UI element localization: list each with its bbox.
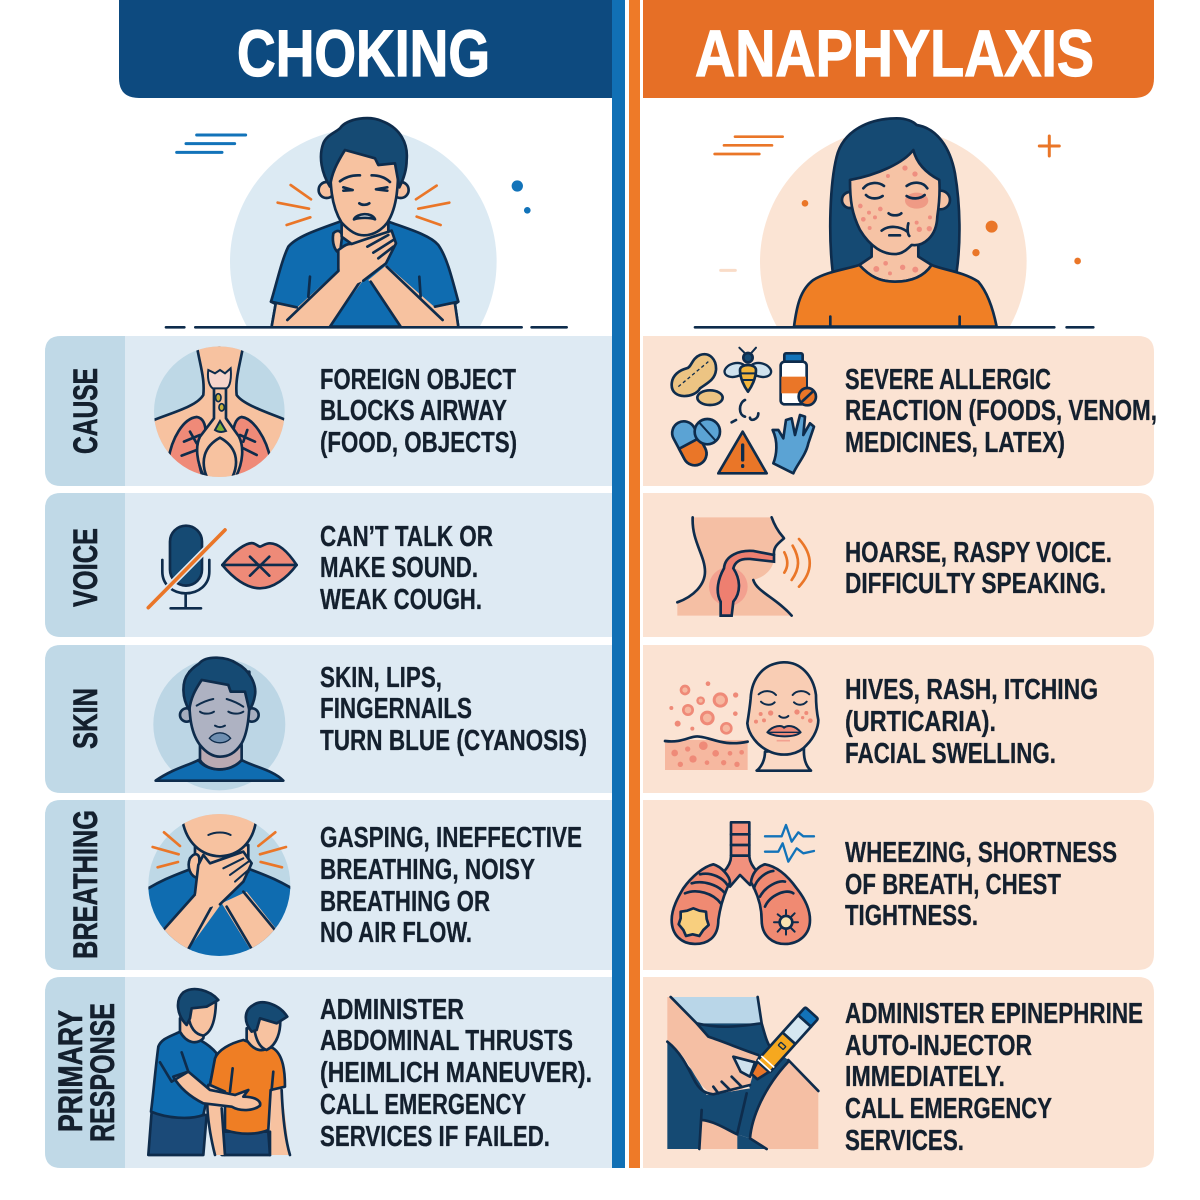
text: primary response choking: (HEIMLICH MANEUVER). xyxy=(320,1057,592,1089)
hero: choking person xyxy=(164,116,568,329)
icon: hands on throat xyxy=(148,814,290,956)
text: voice choking: MAKE SOUND. xyxy=(320,552,478,584)
text: skin choking: SKIN, LIPS, xyxy=(320,662,442,694)
icon: abdominal thrusts figures xyxy=(148,989,290,1155)
row: primary response (choking) xyxy=(45,977,612,1168)
text: voice anaphylaxis: DIFFICULTY SPEAKING. xyxy=(845,568,1106,600)
icon: inflamed airways xyxy=(672,822,814,944)
row: primary response (choking): PRIMARY xyxy=(52,1010,90,1132)
icon: airway blocked by object xyxy=(153,345,287,482)
header: anaphylaxis: ANAPHYLAXIS xyxy=(695,16,1094,90)
text: breathing anaphylaxis xyxy=(845,837,1117,932)
hero: anaphylaxis person xyxy=(694,117,1095,329)
text: skin choking: TURN BLUE (CYANOSIS) xyxy=(320,725,587,757)
row: cause (choking) xyxy=(45,336,612,486)
text: primary response choking: SERVICES IF FAILED. xyxy=(320,1121,550,1153)
icon: allergens xyxy=(668,348,816,473)
text: skin choking: FINGERNAILS xyxy=(320,693,472,725)
text: skin choking xyxy=(320,662,587,757)
row: cause (choking): CAUSE xyxy=(67,368,105,454)
text: skin anaphylaxis: HIVES, RASH, ITCHING xyxy=(845,674,1098,706)
text: primary response anaphylaxis: CALL EMERGENCY xyxy=(845,1093,1052,1125)
row: cause (anaphylaxis) xyxy=(643,336,1157,486)
text: breathing choking: GASPING, INEFFECTIVE xyxy=(320,822,582,854)
text: breathing choking: BREATHING OR xyxy=(320,886,490,918)
text: cause choking: (FOOD, OBJECTS) xyxy=(320,427,517,459)
icon: swollen throat and sound waves xyxy=(677,517,810,616)
text: cause anaphylaxis xyxy=(845,364,1157,459)
header: choking xyxy=(119,0,612,98)
text: breathing anaphylaxis: TIGHTNESS. xyxy=(845,900,978,932)
row: breathing (anaphylaxis) xyxy=(643,800,1154,970)
text: voice choking xyxy=(320,521,493,616)
text: primary response choking xyxy=(320,994,592,1153)
icon: hives and swollen face xyxy=(665,662,818,771)
text: voice anaphylaxis: HOARSE, RASPY VOICE. xyxy=(845,537,1112,569)
row: voice (choking): VOICE xyxy=(67,528,105,607)
row: skin (choking): SKIN xyxy=(67,688,105,749)
row: skin (anaphylaxis) xyxy=(643,645,1154,793)
text: primary response anaphylaxis: AUTO-INJECTOR xyxy=(845,1030,1032,1062)
icon: cyanotic face xyxy=(153,658,285,790)
icon: epinephrine auto-injector on thigh xyxy=(667,997,818,1149)
text: breathing anaphylaxis: WHEEZING, SHORTNESS xyxy=(845,837,1117,869)
header: anaphylaxis xyxy=(643,0,1154,98)
text: skin anaphylaxis: FACIAL SWELLING. xyxy=(845,738,1056,770)
row: skin (choking) xyxy=(45,645,612,793)
row: breathing (choking) xyxy=(45,800,612,970)
text: breathing choking xyxy=(320,822,582,949)
text: primary response anaphylaxis xyxy=(845,998,1143,1157)
center divider xyxy=(612,0,640,1168)
text: voice anaphylaxis xyxy=(845,537,1112,600)
text: primary response choking: CALL EMERGENCY xyxy=(320,1089,526,1121)
text: primary response anaphylaxis: SERVICES. xyxy=(845,1125,964,1157)
row: breathing (choking): BREATHING xyxy=(67,810,105,959)
text: cause anaphylaxis: MEDICINES, LATEX) xyxy=(845,427,1065,459)
text: breathing choking: BREATHING, NOISY xyxy=(320,854,535,886)
icon: muted microphone and closed lips xyxy=(148,526,297,608)
row: primary response (choking): RESPONSE xyxy=(84,1003,122,1142)
text: cause choking xyxy=(320,364,517,459)
text: skin anaphylaxis xyxy=(845,674,1098,770)
text: cause choking: FOREIGN OBJECT xyxy=(320,364,516,396)
row: voice (anaphylaxis) xyxy=(643,493,1154,637)
text: breathing choking: NO AIR FLOW. xyxy=(320,917,472,949)
text: primary response choking: ADMINISTER xyxy=(320,994,464,1026)
text: voice choking: CAN’T TALK OR xyxy=(320,521,493,553)
text: primary response choking: ABDOMINAL THRUSTS xyxy=(320,1025,573,1057)
text: breathing anaphylaxis: OF BREATH, CHEST xyxy=(845,869,1061,901)
header: choking: CHOKING xyxy=(237,16,490,90)
text: voice choking: WEAK COUGH. xyxy=(320,584,482,616)
text: primary response anaphylaxis: IMMEDIATELY. xyxy=(845,1061,1005,1093)
row: primary response (anaphylaxis) xyxy=(643,977,1154,1168)
row: voice (choking) xyxy=(45,493,612,637)
text: cause anaphylaxis: SEVERE ALLERGIC xyxy=(845,364,1051,396)
text: cause choking: BLOCKS AIRWAY xyxy=(320,395,507,427)
text: skin anaphylaxis: (URTICARIA). xyxy=(845,706,996,738)
